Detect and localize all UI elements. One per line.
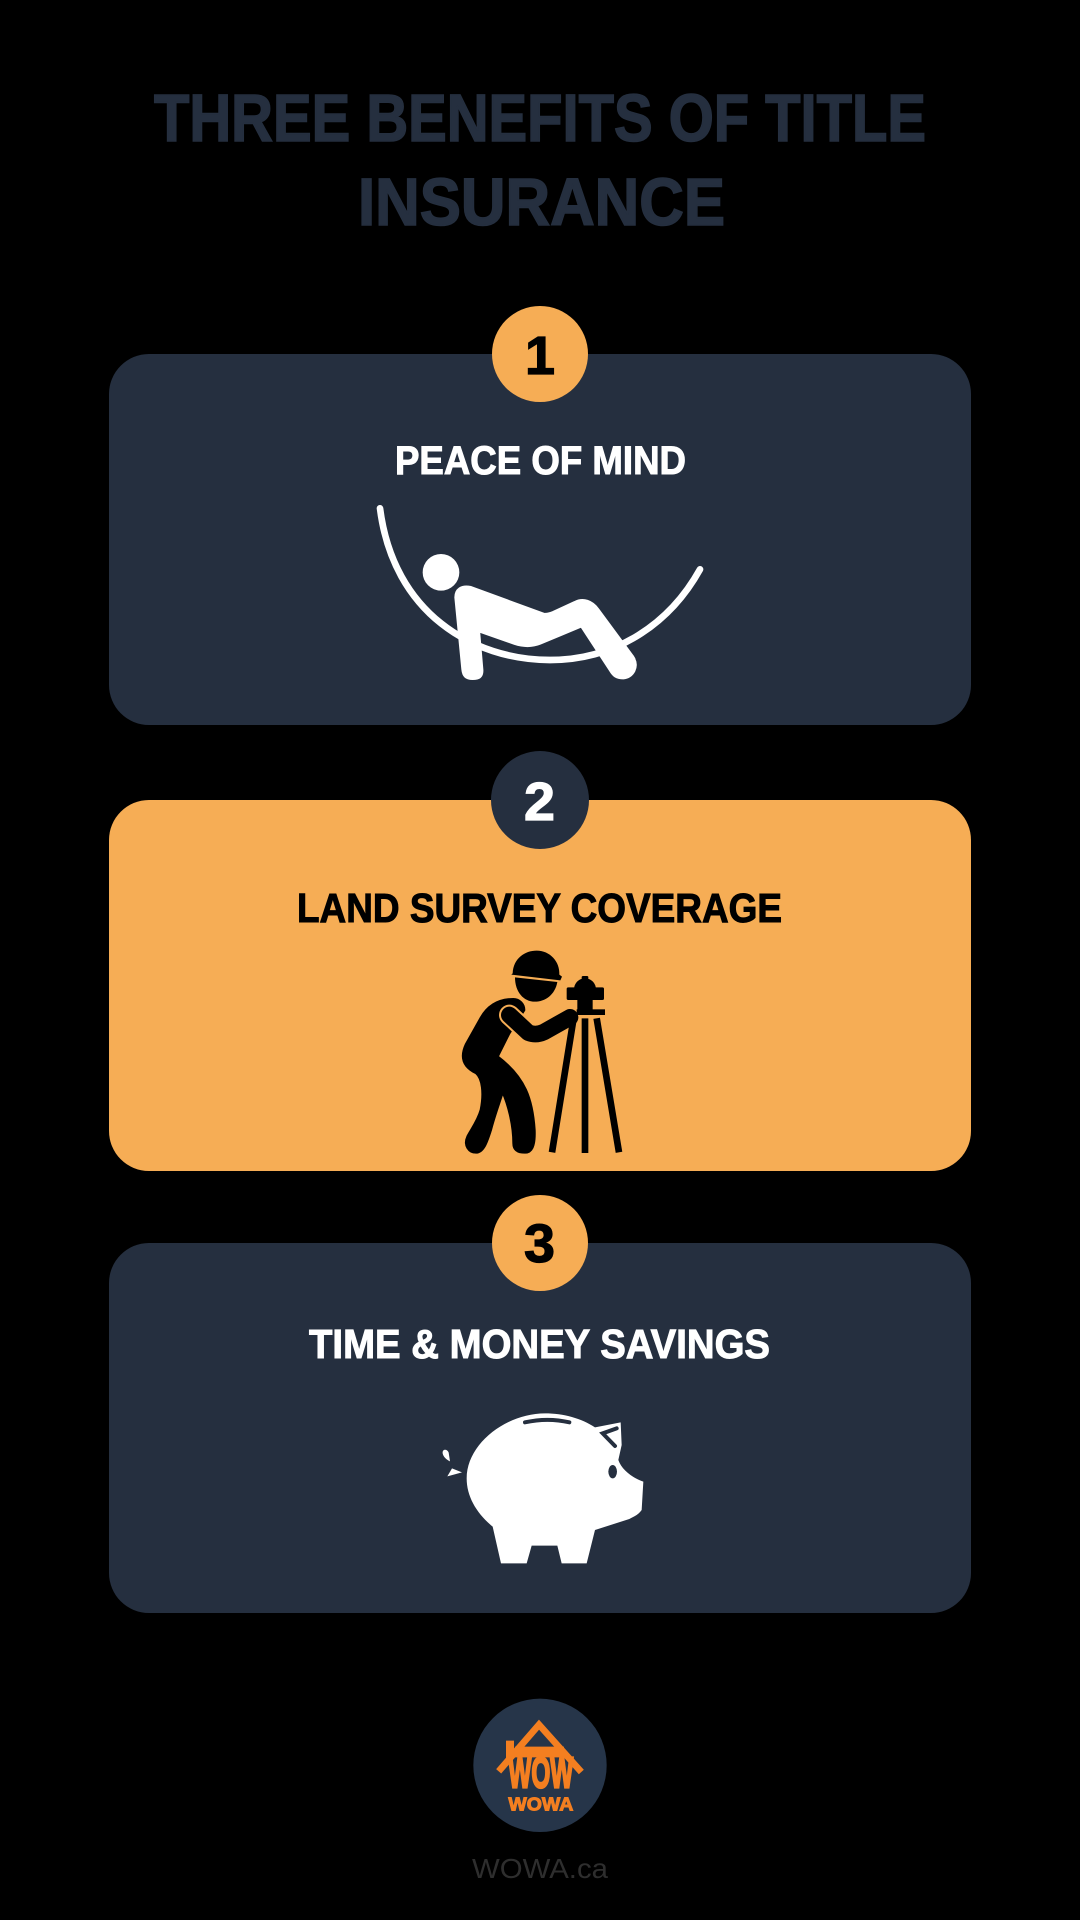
website label: WOWA.ca [472,1853,608,1884]
logo: WOWA house badge: WOW [508,1748,574,1797]
number badge 3: 3 [524,1214,555,1274]
title [154,81,926,240]
logo: WOWA house badge: WOWA [508,1794,573,1815]
title: INSURANCE [358,165,725,240]
number badge 3 [492,1195,588,1291]
number badge 2: 2 [524,772,555,832]
number badge 1: 1 [525,326,555,386]
icon: piggy bank [443,1413,643,1563]
icon: person in hammock [380,508,700,678]
heading: peace of mind: PEACE OF MIND [395,439,686,483]
card background [109,354,971,725]
number badge 1 [492,306,588,402]
panel: peace of mind [109,306,971,725]
panel: land survey coverage [109,751,971,1171]
title: THREE BENEFITS OF TITLE [154,81,926,156]
number badge 2 [491,751,589,849]
heading: land survey coverage: LAND SURVEY COVERAGE [297,885,782,931]
panel: time and money savings [109,1195,971,1613]
card background [109,800,971,1171]
icon: surveyor with tripod [463,951,619,1153]
card background [109,1243,971,1613]
heading: time and money savings: TIME & MONEY SAVINGS [309,1321,770,1367]
logo: WOWA house badge [473,1699,607,1832]
